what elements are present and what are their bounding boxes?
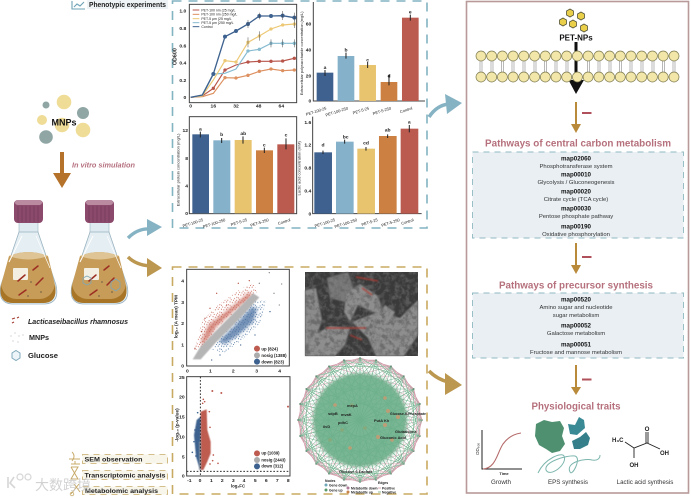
icon: growth curve: OD₆₀₀ (475, 443, 480, 455)
label: transcriptomic analysis (71, 467, 168, 480)
bar chart: extracellular protein: a (199, 127, 202, 133)
label: metabolomic analysis (70, 484, 168, 496)
flask: control culture (0, 200, 57, 304)
bar chart: lactic acid: 0 (309, 211, 312, 217)
panel: omics analyses (172, 267, 448, 498)
bar chart: extracellular polysaccharide: e (409, 10, 412, 16)
line chart: OD600 growth curves: 32 (233, 104, 239, 110)
box: central carbon pathways: map00190 (561, 223, 592, 230)
volcano plot: 0 (186, 369, 189, 375)
bar chart: extracellular polysaccharide: d (387, 74, 391, 80)
label: PET-NPs: PET-NPs (559, 34, 593, 42)
icon: lactic acid structure: OH (660, 451, 669, 457)
volcano plot: 5 (182, 454, 185, 460)
bar chart: extracellular polysaccharide: PET-100-25 (305, 105, 328, 117)
box: precursor pathways: Galactose metabolism (547, 331, 605, 337)
metabolite-gene network: PutA Kh (374, 418, 390, 423)
volcano plot: 2 (221, 478, 224, 484)
network legend: Nodes (325, 479, 335, 483)
box: central carbon pathways: map00010 (561, 171, 592, 178)
volcano plot: -log₁₀ (p-value) (174, 408, 179, 442)
icon: growth curve: Growth (491, 479, 512, 486)
volcano plot: 7 (276, 478, 279, 484)
volcano plot: up (1039) (261, 451, 280, 456)
metabolite-gene network: Glucose 6-Lactate (339, 469, 373, 474)
volcano plot: nosig (2443) (261, 457, 286, 462)
box: central carbon pathways: map00030 (561, 205, 592, 212)
watermark: 大数跨境 (35, 477, 91, 493)
bar chart: extracellular protein: 12 (182, 128, 188, 134)
icon: growth curve: Time (499, 471, 509, 476)
volcano plot: 25 (179, 375, 185, 381)
line chart: OD600 growth curves: PET-5 μm (250 mg/L (201, 21, 234, 25)
flask: MNP-treated culture (71, 200, 128, 304)
scatter plot: log2 A mean TPM: 0 (181, 364, 184, 370)
metabolite-gene network: Glucose-6-Phosphate (390, 412, 426, 416)
network legend: Positive (382, 486, 395, 490)
arrow: omics to pathways (429, 371, 462, 395)
bar chart: extracellular polysaccharide: PET-5-250 (372, 105, 392, 116)
bar chart: lactic acid: 0.4 (304, 188, 312, 194)
volcano plot: 4 (243, 478, 246, 484)
label: in vitro simulation: In vitro simulation (72, 160, 136, 170)
line chart: OD600 growth curves: OD600 (172, 48, 178, 65)
box: central carbon pathways: Oxidative phosphorylation (542, 232, 610, 238)
volcano plot: -1 (187, 478, 192, 484)
bar chart: lactic acid: a (408, 119, 411, 125)
bar chart: extracellular polysaccharide: b (344, 48, 348, 54)
bar chart: extracellular protein: ab (240, 131, 246, 137)
box: central carbon pathways: map00020 (561, 188, 592, 195)
volcano plot: 1 (210, 478, 213, 484)
bar chart: lactic acid: 1.6 (304, 120, 312, 126)
volcano plot: 10 (179, 434, 185, 440)
arrow: to phenotypic experiments (128, 219, 162, 238)
bar chart: extracellular protein: 8 (185, 156, 188, 162)
volcano plot: 0 (182, 474, 185, 480)
box: central carbon pathways: Citrate cycle (TCA cycle) (544, 197, 608, 203)
line chart: OD600 growth curves: PET-100 nm (25 mg/L (201, 8, 235, 12)
metabolite-gene network (272, 332, 448, 498)
icon: EPS synthesis (535, 417, 600, 486)
scatter plot: log2 A mean TPM: 2 (181, 321, 184, 327)
SEM micrograph (305, 272, 418, 356)
bar chart: extracellular polysaccharide: 60 (306, 22, 312, 28)
bar chart: extracellular protein: PET-100-250 (202, 217, 227, 229)
line chart: OD600 growth curves: 16 (211, 104, 216, 110)
box: central carbon pathways: map02060 (561, 155, 592, 162)
box: central carbon pathways: Pentose phosphate pathway (539, 214, 613, 220)
line chart: OD600 growth curves: 0.8 (179, 26, 187, 32)
heading: phenotypic experiments: Phenotypic experiments (89, 0, 166, 9)
bar chart: extracellular polysaccharide: 20 (306, 73, 312, 79)
bar chart: extracellular polysaccharide: PET-100-250 (325, 105, 349, 118)
bar chart: lactic acid: Control (401, 217, 414, 226)
icon: lactic acid structure: OH (630, 463, 638, 469)
bar chart: lactic acid: 1.2 (304, 143, 312, 149)
volcano plot: 3 (255, 369, 258, 375)
scatter plot: log2 A mean TPM: down (823) (261, 359, 284, 364)
box: precursor pathways: Amino sugar and nucleotide (539, 305, 613, 311)
bar chart: lactic acid: d (321, 143, 325, 149)
label: metabolomic analysis: Metabolomic analysis (85, 488, 159, 495)
network legend: Metabolite up (351, 490, 373, 494)
line chart: OD600 growth curves: 1.0 (179, 8, 187, 14)
network legend: Gene down (329, 484, 347, 488)
bar chart: extracellular polysaccharide (300, 2, 425, 118)
legend item: glucose: Glucose (28, 351, 58, 360)
volcano plot: 3 (232, 478, 235, 484)
label: transcriptomic analysis: Transcriptomic analysis (84, 472, 166, 480)
bar chart: extracellular polysaccharide: Control (399, 105, 413, 114)
bar chart: lactic acid: bc (343, 134, 349, 140)
bar chart: extracellular protein: PET-5-250 (250, 217, 270, 228)
watermark (8, 474, 91, 493)
line chart: OD600 growth curves: 0.4 (179, 61, 187, 67)
box: precursor pathways: Fructose and mannose metabolism (530, 350, 622, 356)
volcano plot: 20 (179, 394, 185, 400)
volcano plot (174, 369, 290, 489)
line chart: OD600 growth curves: 48 (256, 104, 262, 110)
bar chart: extracellular protein: b (220, 132, 223, 138)
line chart: OD600 growth curves: 0 (189, 104, 192, 110)
arrow: inhibition to central carbon (571, 102, 592, 133)
volcano plot: 15 (179, 414, 185, 420)
line chart: OD600 growth curves: 64 (279, 104, 284, 110)
bar chart: lactic acid: PET-100-250 (334, 217, 358, 229)
icon: lactic acid structure (612, 426, 673, 486)
volcano plot: 8 (287, 478, 290, 484)
bar chart: extracellular polysaccharide: 40 (306, 47, 312, 53)
bar chart: extracellular protein: 4 (185, 184, 188, 190)
bar chart: lactic acid: PET-100-25 (314, 217, 336, 229)
panel: phenotypic experiments (72, 0, 427, 229)
bar chart: extracellular polysaccharide: c (366, 57, 369, 63)
volcano plot: 2 (232, 369, 235, 375)
metabolite-gene network: ilvD (323, 424, 330, 429)
box: precursor pathways (472, 293, 684, 358)
scatter plot: log2 A mean TPM: nosig (1388) (261, 353, 287, 358)
network legend: Edges (378, 481, 388, 485)
line chart: OD600 growth curves: Control (201, 25, 213, 29)
panel: mechanism summary (466, 2, 688, 493)
line chart: OD600 growth curves: 0 (184, 95, 187, 101)
metabolite-gene network: Gluconic Acid (380, 435, 407, 440)
bar chart: extracellular polysaccharide: PET-5-25 (352, 105, 370, 115)
bar chart: extracellular polysaccharide: Extracellular polysaccharide concentration (mg/L) (300, 11, 304, 95)
box: central carbon pathways (472, 152, 684, 238)
network legend: Gene up (329, 488, 343, 492)
legend: culture contents (10, 317, 128, 360)
icon: lactic acid structure: O (645, 426, 650, 433)
cell membrane (476, 51, 679, 82)
scatter plot: log2 A mean TPM: 1 (181, 342, 184, 348)
bar chart: lactic acid: cd (363, 140, 369, 146)
network legend (324, 479, 396, 494)
box: precursor pathways: map00052 (561, 322, 592, 329)
metabolite-gene network: sdpB (328, 411, 338, 416)
scatter plot: log2 A mean TPM (174, 269, 289, 370)
bar chart: extracellular protein (175, 117, 297, 229)
arrow: inhibition to physiological traits (571, 365, 592, 395)
network legend: Metabolite down (351, 486, 378, 490)
volcano plot: 4 (278, 369, 281, 375)
bar chart: extracellular protein: c (285, 132, 288, 138)
box: precursor pathways: sugar metabolism (553, 313, 599, 319)
icon: MNPs particle cluster: MNPs (51, 118, 77, 128)
bar chart: lactic acid: 0.8 (304, 166, 312, 172)
line chart: OD600 growth curves (172, 4, 297, 110)
line chart: OD600 growth curves: 0.6 (179, 43, 187, 49)
volcano plot: 1 (209, 369, 212, 375)
bar chart: extracellular protein: c (263, 142, 266, 148)
arrow: phenotypic to pathways (429, 94, 462, 117)
volcano plot: down (312) (261, 464, 284, 469)
bar chart: extracellular protein: PET-100-25 (182, 217, 204, 229)
heading: physiological traits: Physiological traits (532, 402, 621, 412)
arrow: MNPs to flasks (53, 152, 71, 188)
line chart: OD600 growth curves: PET-5 μm (25 mg/L (201, 17, 232, 21)
label: SEM observation (69, 452, 168, 464)
bar chart: lactic acid: PET-5-250 (381, 217, 401, 228)
bar chart: extracellular protein: 0 (185, 211, 188, 217)
line chart: OD600 growth curves: 0.2 (179, 78, 187, 84)
heading: precursor synthesis: Pathways of precursor synthesis (499, 280, 653, 292)
legend item: bacteria: Lacticaseibacillus rhamnosus (28, 317, 128, 326)
bar chart: extracellular protein: PET-5-25 (230, 217, 248, 227)
bar chart: extracellular protein: Control (277, 217, 291, 226)
line chart: OD600 growth curves: PET-100 nm (250 mg/L (201, 13, 237, 17)
icon: EPS synthesis: EPS synthesis (548, 479, 588, 486)
icon: lactic acid structure: H₃C (612, 438, 624, 444)
heading: central carbon metabolism: Pathways of central carbon metabolism (485, 138, 671, 150)
metabolite-gene network: mepA (347, 403, 358, 408)
arrow: black penetration arrow (568, 42, 584, 94)
bar chart: lactic acid (296, 117, 422, 229)
metabolite-gene network: pdhC (338, 420, 348, 425)
box: precursor pathways: map00520 (561, 296, 592, 303)
bar chart: lactic acid: PET-5-25 (361, 217, 379, 227)
arrow: to omics analyses (128, 257, 162, 277)
metabolite-gene network: mvaK (341, 412, 352, 417)
arrow: inhibition to precursor synthesis (571, 243, 592, 274)
bar chart: lactic acid: Lactic acid concentration (mM) (296, 141, 301, 195)
scatter plot: log2 A mean TPM: 3 (181, 300, 184, 306)
box: central carbon pathways: Glycolysis / Gluconeogenesis (538, 180, 615, 186)
scatter plot: log2 A mean TPM: 4 (181, 279, 184, 285)
volcano plot: 5 (254, 478, 257, 484)
icon: MNPs particle cluster (37, 95, 90, 144)
volcano plot: log₂FC (231, 484, 245, 489)
legend item: MNPs: MNPs (29, 335, 49, 342)
icon: growth curve (475, 430, 522, 486)
metabolite-gene network: Glutathione (395, 429, 417, 434)
scatter plot: log2 A mean TPM: log₁₀ (A mean) TPM (174, 295, 179, 338)
bar chart: extracellular polysaccharide: a (324, 65, 327, 71)
bar chart: lactic acid: ab (385, 127, 391, 133)
network legend: Negative (382, 490, 396, 494)
label: SEM observation: SEM observation (84, 456, 143, 464)
icon: lactic acid structure: Lactic acid synthesis (617, 479, 673, 486)
box: precursor pathways: map00051 (561, 341, 592, 348)
bar chart: extracellular protein: Extracellular protein concentration (mg/L) (175, 133, 180, 206)
volcano plot: 6 (265, 478, 268, 484)
scatter plot: log2 A mean TPM: up (824) (261, 346, 278, 351)
volcano plot: 0 (199, 478, 202, 484)
icon: PET-NPs hexagons (560, 9, 588, 32)
box: central carbon pathways: Phosphotransferase system (539, 164, 613, 170)
bar chart: extracellular polysaccharide: 0 (309, 99, 312, 105)
